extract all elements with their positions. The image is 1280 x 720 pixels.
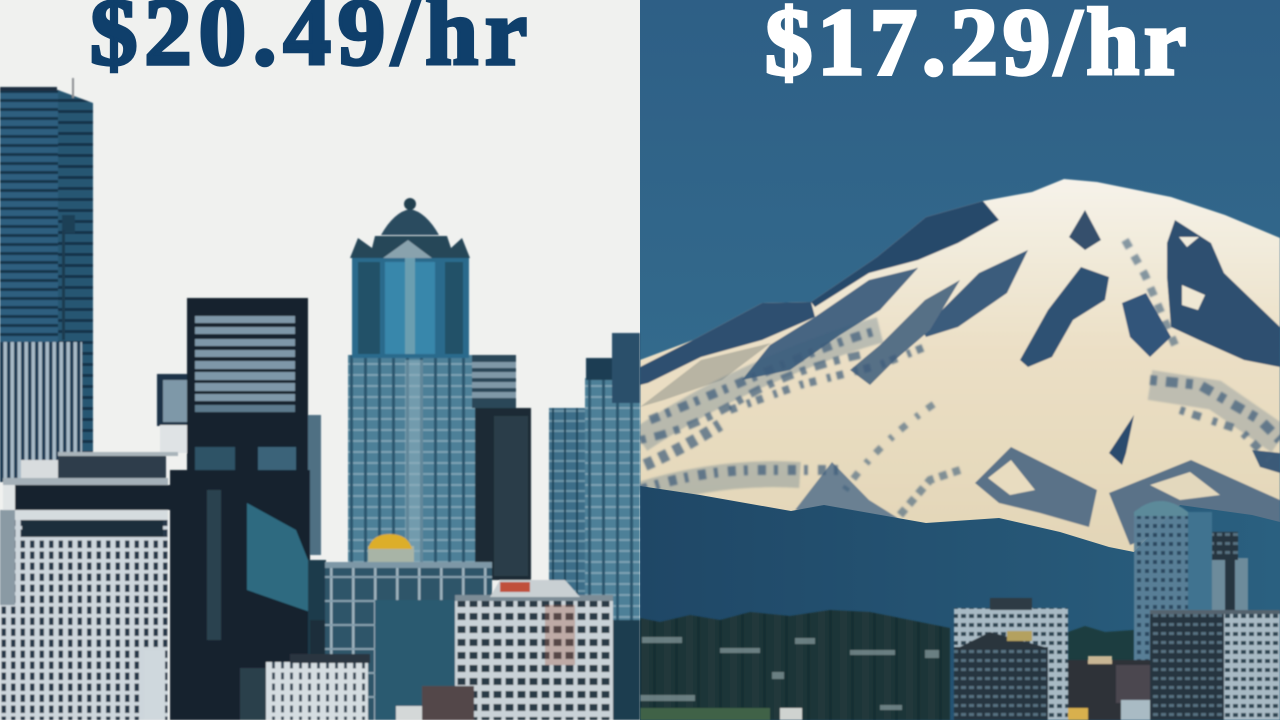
building: right foreground block <box>1150 610 1280 720</box>
illustration: dark foothills <box>640 486 1280 720</box>
building: dark tower right of crown <box>472 355 531 580</box>
buildings: right skyline <box>954 501 1280 720</box>
building: low white block bottom <box>240 654 370 720</box>
building: white foreground office center <box>455 580 613 720</box>
building: low left white office <box>0 452 180 720</box>
building: left pale tower <box>0 342 82 482</box>
building: far left tall tower <box>0 78 93 460</box>
building: bottom small dark block <box>396 686 474 720</box>
building: glass podium with gold dome <box>310 534 492 720</box>
panel: left city background <box>0 0 640 720</box>
building: dark mid block <box>170 470 326 720</box>
illustration: tree line <box>640 610 1134 720</box>
building: small dark tower behind <box>157 374 188 453</box>
building: central foreground block <box>954 598 1068 720</box>
panel: right mountain sky <box>640 0 1280 720</box>
building: striped black tower <box>187 298 321 560</box>
building: small distant houses <box>1068 656 1150 720</box>
building: right blue tower <box>1134 501 1248 660</box>
building: central crown skyscraper <box>348 198 476 570</box>
buildings: left skyline <box>0 78 640 720</box>
building: right edge glass towers <box>549 333 640 720</box>
rock band texture <box>640 240 1280 515</box>
illustration: mountain <box>640 179 1280 560</box>
